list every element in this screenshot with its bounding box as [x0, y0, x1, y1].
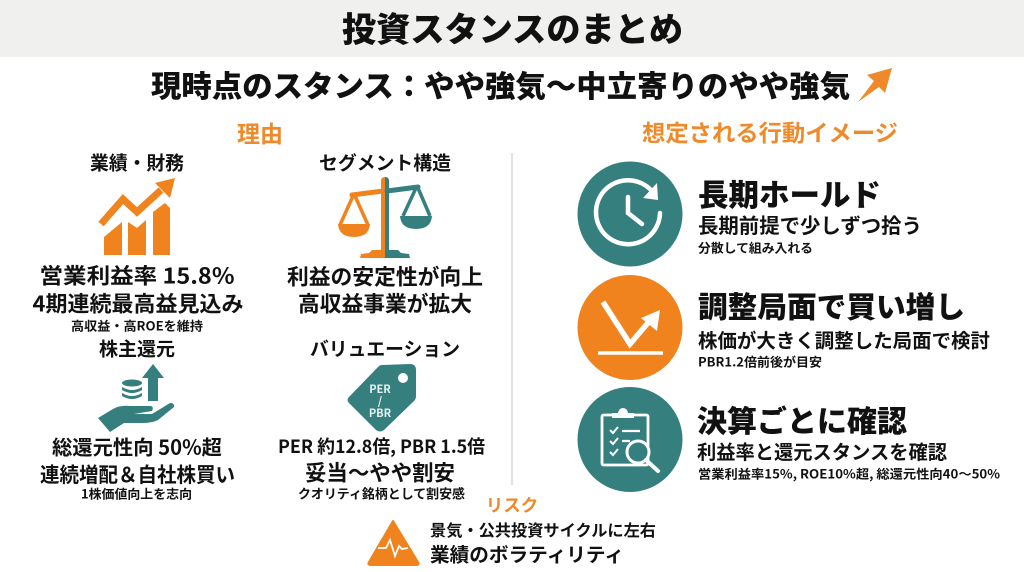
panel: shareholder returns: [40, 334, 235, 502]
action title: 長期ホールド: [698, 171, 881, 215]
icon: warning triangle with pulse: [368, 521, 419, 565]
action note: 分散して組み入れる: [698, 238, 813, 256]
icon: PER / PBR price tag: PBR: [369, 405, 392, 421]
heading: valuation: バリュエーション: [310, 334, 460, 362]
action title: 調整局面で買い増し: [698, 284, 965, 326]
heading: segment structure: セグメント構造: [319, 148, 451, 176]
title: 投資スタンスのまとめ: [342, 2, 683, 52]
action note: 営業利益率15%, ROE10%超, 総還元性向40〜50%: [698, 464, 1000, 482]
panel: valuation: [278, 334, 485, 502]
icon: PER / PBR price tag: /: [378, 393, 382, 409]
valuation verdict: 妥当〜やや割安: [305, 456, 455, 488]
panel: buy on dips: [578, 275, 990, 380]
record profit outlook: 4期連続最高益見込み: [32, 288, 244, 318]
icon: balance scale: [338, 177, 432, 258]
icon: PER / PBR price tag: PER: [369, 381, 391, 397]
icon: clipboard and magnifier: [578, 387, 682, 492]
action description: 長期前提で少しずつ拾う: [698, 209, 922, 239]
heading: reasons: 理由: [237, 115, 283, 149]
margin note: 高収益・高ROEを維持: [71, 316, 204, 334]
icon: rising bar chart: [101, 178, 175, 255]
icon: up-right arrow: [858, 68, 892, 102]
icon: clock with arrow: [578, 162, 682, 266]
profit stability: 利益の安定性が向上: [287, 260, 483, 292]
current stance headline: 現時点のスタンス：やや強気〜中立寄りのやや強気: [151, 62, 850, 106]
panel: risk: [368, 492, 656, 568]
heading: expected actions: 想定される行動イメージ: [642, 114, 898, 148]
icon: dip and rebound arrow: [578, 275, 682, 380]
action title: 決算ごとに確認: [697, 397, 907, 441]
heading: shareholder returns: 株主還元: [99, 334, 175, 362]
panel: earnings and financials: [32, 148, 244, 334]
dividends and buybacks: 連続増配＆自社株買い: [40, 458, 235, 488]
header band: [0, 0, 1024, 57]
action description: 利益率と還元スタンスを確認: [697, 437, 947, 465]
icon: hand with coins and up arrow: [98, 364, 174, 432]
heading: earnings and financials: 業績・財務: [90, 148, 184, 176]
icon: PER / PBR price tag: [348, 364, 416, 432]
operating margin: 営業利益率 15.8%: [40, 260, 235, 290]
panel: check each earnings: [578, 387, 1000, 492]
high margin business: 高収益事業が拡大: [298, 288, 472, 318]
risk description: 景気・公共投資サイクルに左右: [430, 517, 656, 541]
PER and PBR values: PER 約12.8倍, PBR 1.5倍: [278, 433, 485, 459]
per share value note: 1株価値向上を志向: [81, 484, 192, 502]
action note: PBR1.2倍前後が目安: [698, 352, 822, 370]
total return ratio: 総還元性向 50%超: [52, 432, 222, 460]
quality stock note: クオリティ銘柄として割安感: [298, 484, 465, 502]
risk title: 業績のボラティリティ: [430, 538, 624, 568]
panel: long-term hold: [578, 162, 922, 266]
heading: risk: リスク: [486, 492, 538, 518]
action description: 株価が大きく調整した局面で検討: [698, 324, 990, 354]
panel: segment structure: [287, 148, 483, 318]
